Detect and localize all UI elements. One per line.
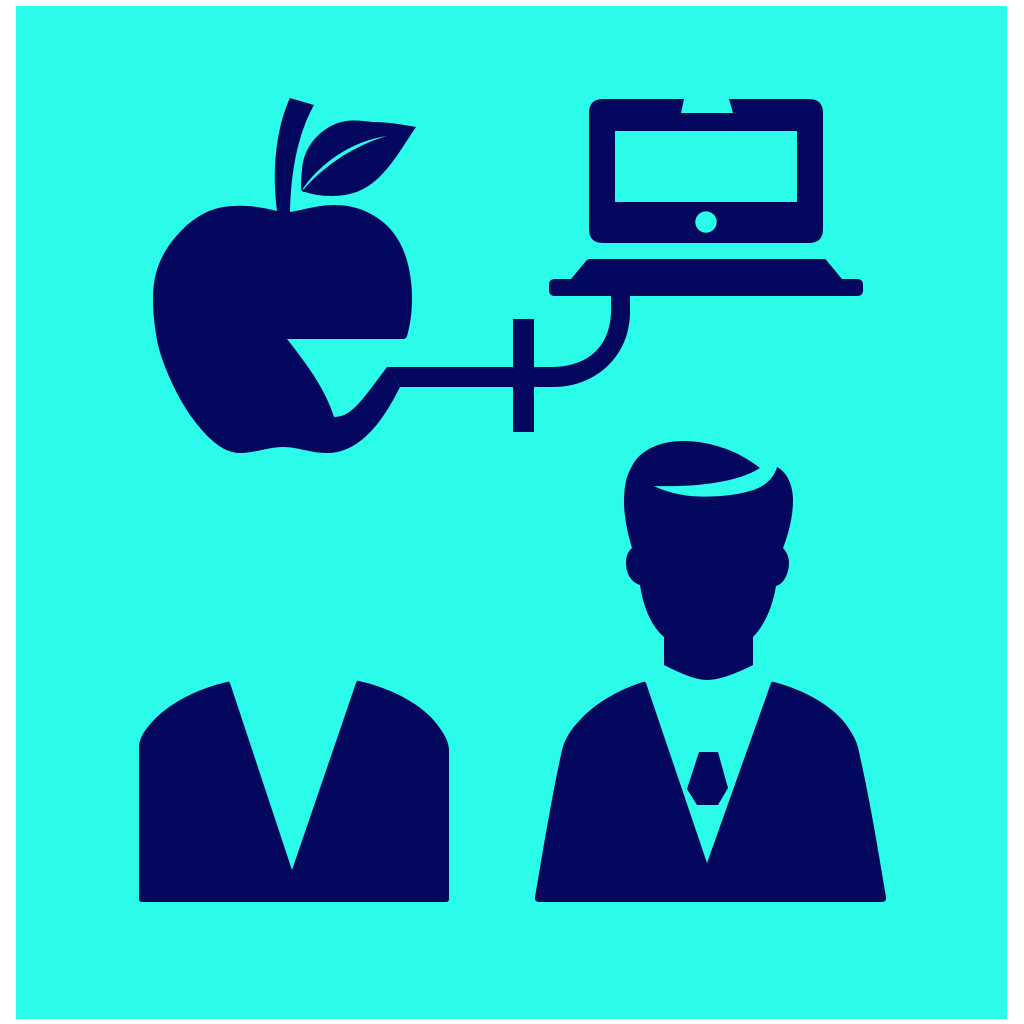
icon: laptop xyxy=(549,99,863,296)
laptop base xyxy=(549,259,863,296)
head with hair and ears xyxy=(624,441,793,680)
apple body and stem xyxy=(153,98,412,453)
necktie knot xyxy=(687,752,728,805)
leaf vein xyxy=(302,136,387,190)
suit jacket xyxy=(535,682,886,902)
laptop screen xyxy=(589,99,823,243)
connector: pipe from apple to laptop with cross bar xyxy=(387,290,630,432)
icon: second figure's suit jacket xyxy=(139,681,449,902)
icon: apple with stem, leaf and bite xyxy=(153,98,416,453)
apple leaf xyxy=(301,120,416,196)
icon: man with tie xyxy=(535,441,886,902)
